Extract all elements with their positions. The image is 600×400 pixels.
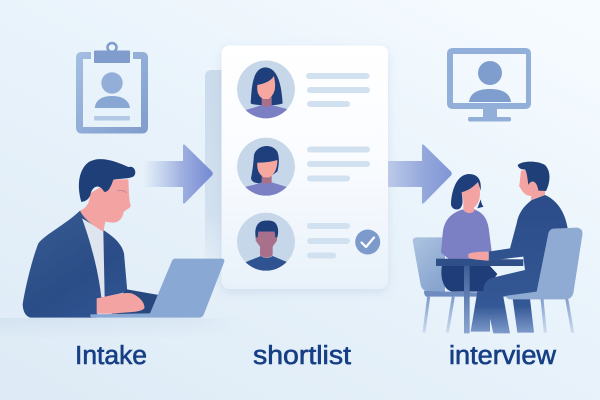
hair [79, 159, 135, 202]
woman face [462, 182, 480, 213]
label: Intake: Intake [75, 342, 147, 370]
laptop [90, 259, 224, 318]
hand [97, 293, 144, 314]
candidate avatars [237, 60, 295, 272]
woman legs [471, 292, 490, 332]
desk surface [0, 318, 194, 324]
hands [468, 252, 489, 261]
panel: shortlist card [222, 46, 388, 289]
woman lap [441, 260, 497, 292]
shirt [82, 218, 105, 297]
right chair [506, 228, 582, 299]
icon: candidate clipboard [76, 43, 148, 134]
avatar: candidate three [237, 213, 295, 272]
table [436, 259, 523, 333]
icon: check badge [355, 230, 380, 254]
right chair legs [542, 299, 573, 333]
figure: interview scene [413, 162, 582, 333]
man hair [518, 162, 550, 191]
eyebrow [117, 191, 127, 193]
jacket [23, 211, 127, 318]
woman hair [451, 174, 484, 209]
text placeholder lines [306, 73, 370, 258]
label: interview: interview [449, 342, 557, 370]
man face [519, 169, 545, 200]
avatar: candidate one [237, 60, 295, 120]
woman torso [441, 209, 492, 260]
face and neck [80, 179, 131, 232]
left chair [413, 237, 478, 333]
panel: shadow sheet behind card [205, 70, 222, 292]
figure: man at laptop [23, 159, 224, 318]
label: shortlist: shortlist [253, 342, 351, 370]
man body [483, 195, 568, 333]
man back leg [513, 299, 534, 333]
arrow: shortlist to interview [388, 144, 452, 204]
forearm sleeve [112, 289, 159, 314]
avatar: candidate two [237, 138, 295, 197]
icon: video call monitor [447, 48, 531, 122]
arrow: intake to shortlist [143, 144, 213, 204]
